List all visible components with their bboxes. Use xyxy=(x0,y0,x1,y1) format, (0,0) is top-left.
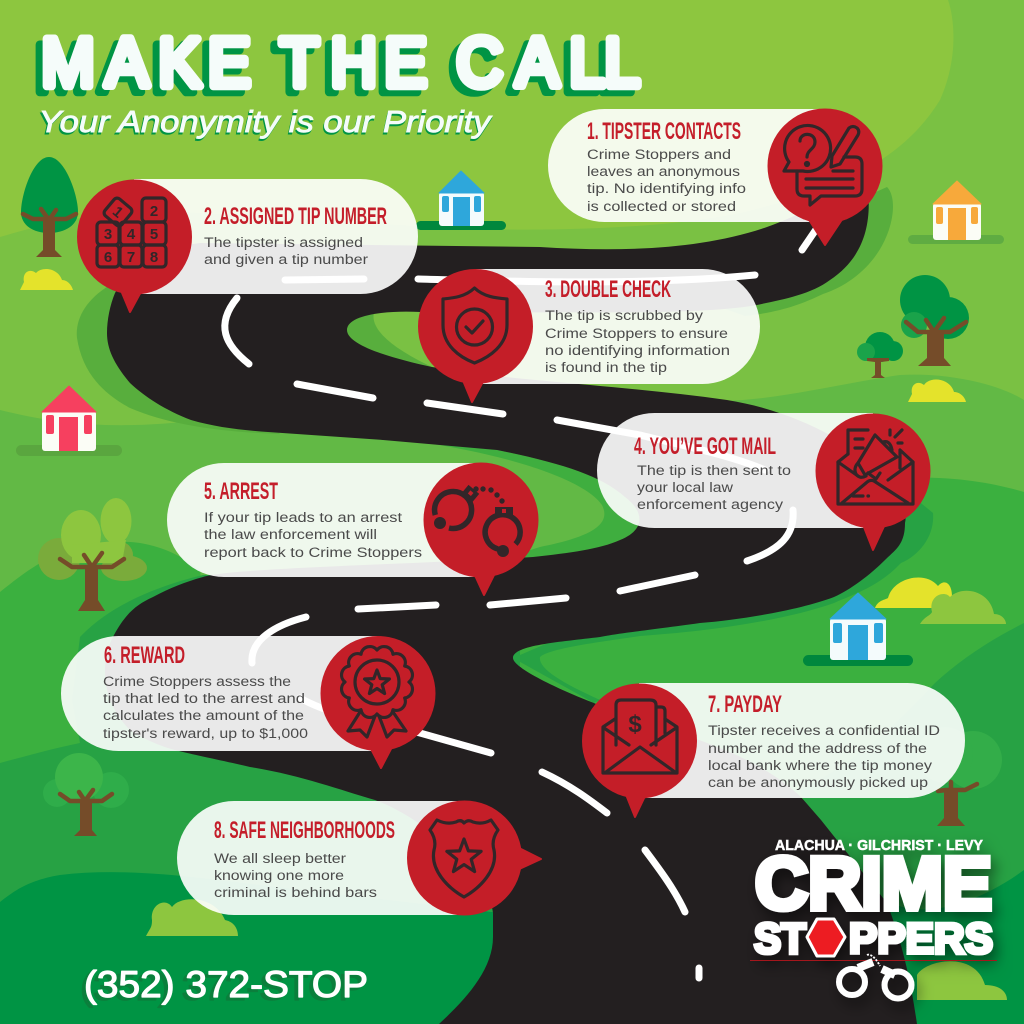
step 1: tipster contacts: leaves an anonymous xyxy=(587,164,740,179)
icon: envelope with money: $ xyxy=(628,711,642,738)
logo: handcuffs xyxy=(839,955,912,998)
step 6: reward xyxy=(61,636,435,768)
icon: shield with check xyxy=(443,288,507,363)
step 7: payday: local bank where the tip money xyxy=(708,758,932,773)
icon: envelope with megaphone xyxy=(838,430,913,504)
logo: Crime Stoppers: ST xyxy=(754,915,806,963)
step 8: safe neighborhoods: We all sleep better xyxy=(214,851,347,866)
step 1: tipster contacts: Crime Stoppers and xyxy=(587,147,731,162)
tree: right small xyxy=(857,332,903,378)
step 7: payday: 7. PAYDAY xyxy=(708,691,782,718)
step 7: payday: Tipster receives a confidential ID xyxy=(708,723,940,738)
step 5: arrest xyxy=(167,462,538,595)
road centre dashes xyxy=(225,228,817,978)
house: blue top xyxy=(416,171,506,230)
tree: light green xyxy=(38,498,147,611)
step 8: safe neighborhoods: criminal is behind bars xyxy=(214,885,377,900)
icon: number keypad: 8 xyxy=(150,249,158,266)
step 7: payday: number and the address of the xyxy=(708,741,927,756)
step 4: you've got mail: 4. YOU’VE GOT MAIL xyxy=(634,433,776,460)
house: blue lower xyxy=(803,593,913,666)
road tongue between bends xyxy=(340,300,639,566)
step 5: arrest: the law enforcement will xyxy=(204,527,377,542)
logo: Crime Stoppers: PPERS xyxy=(849,915,993,963)
step 6: reward: tip that led to the arrest and xyxy=(103,691,305,706)
icon: award rosette xyxy=(342,647,412,737)
icon: number keypad: 3 xyxy=(104,226,112,243)
logo: Crime Stoppers: ALACHUA · GILCHRIST · LEVY xyxy=(775,837,983,854)
step 5: arrest: 5. ARREST xyxy=(204,478,278,505)
step 1: tipster contacts: 1. TIPSTER CONTACTS xyxy=(587,118,741,145)
step 3: double check: no identifying information xyxy=(545,343,730,358)
subtitle: Your Anonymity is our Priority xyxy=(38,104,493,139)
icon: number keypad: 4 xyxy=(127,226,136,243)
icon: envelope with money xyxy=(603,700,677,773)
road xyxy=(105,180,917,1024)
step 7: payday xyxy=(582,683,965,817)
step 4: you've got mail: enforcement agency xyxy=(637,497,783,512)
step 2: assigned tip number: The tipster is assigned xyxy=(204,235,363,250)
bushes xyxy=(20,269,1007,1000)
subtitle: Your Anonymity is our Priority xyxy=(37,106,493,141)
icon: police badge xyxy=(430,820,498,897)
step 6: reward: tipster's reward, up to $1,000 xyxy=(103,726,308,741)
icon: number keypad xyxy=(97,197,166,267)
step 8: safe neighborhoods: 8. SAFE NEIGHBORHOODS xyxy=(214,817,395,844)
title: MAKE THE CALL xyxy=(34,31,633,107)
icon: handcuffs xyxy=(434,485,520,557)
icon: number keypad: 6 xyxy=(104,249,112,266)
house: red xyxy=(16,386,122,456)
step 3: double check: is found in the tip xyxy=(545,360,667,375)
step 8: safe neighborhoods: knowing one more xyxy=(214,868,344,883)
step 2: assigned tip number xyxy=(77,179,418,312)
step 5: arrest: If your tip leads to an arrest xyxy=(204,510,402,525)
icon: number keypad: 7 xyxy=(127,249,135,266)
icon: number keypad: 2 xyxy=(150,203,158,220)
step 5: arrest: report back to Crime Stoppers xyxy=(204,545,422,560)
phone number: (352) 372-STOP xyxy=(84,964,368,1005)
step 1: tipster contacts: is collected or stored xyxy=(587,199,736,214)
step 3: double check: Crime Stoppers to ensure xyxy=(545,326,728,341)
house: orange xyxy=(908,181,1004,244)
step 4: you've got mail: The tip is then sent to xyxy=(637,463,791,478)
step 3: double check xyxy=(418,269,760,402)
tree: dark green egg xyxy=(21,157,78,257)
step 1: tipster contacts: tip. No identifying info xyxy=(587,181,746,196)
step 4: you've got mail: your local law xyxy=(637,480,733,495)
step 8: safe neighborhoods xyxy=(177,800,541,916)
icon: number keypad: 1 xyxy=(109,203,126,222)
step 6: reward: calculates the amount of the xyxy=(103,708,304,723)
step 1: tipster contacts xyxy=(548,108,882,245)
icon: number keypad: 5 xyxy=(150,226,158,243)
icon: question and pen xyxy=(784,125,862,205)
step 3: double check: The tip is scrubbed by xyxy=(545,308,703,323)
step 2: assigned tip number: 2. ASSIGNED TIP NUMBER xyxy=(204,203,387,230)
tree: right large xyxy=(900,275,969,366)
step 4: you've got mail xyxy=(597,413,930,550)
tree: lower left xyxy=(43,753,129,836)
tree: behind payday xyxy=(917,727,1002,826)
step 3: double check: 3. DOUBLE CHECK xyxy=(545,276,671,303)
logo: Crime Stoppers xyxy=(750,837,997,998)
logo: Crime Stoppers: CRIME xyxy=(755,842,992,925)
step 6: reward: 6. REWARD xyxy=(104,642,185,669)
step 2: assigned tip number: and given a tip number xyxy=(204,252,369,267)
step 7: payday: can be anonymously picked up xyxy=(708,775,928,790)
title: MAKE THE CALL xyxy=(41,25,640,101)
step 6: reward: Crime Stoppers assess the xyxy=(103,674,291,689)
logo: stop-sign hexagon xyxy=(807,919,845,956)
phone number: (352) 372-STOP xyxy=(80,967,364,1008)
